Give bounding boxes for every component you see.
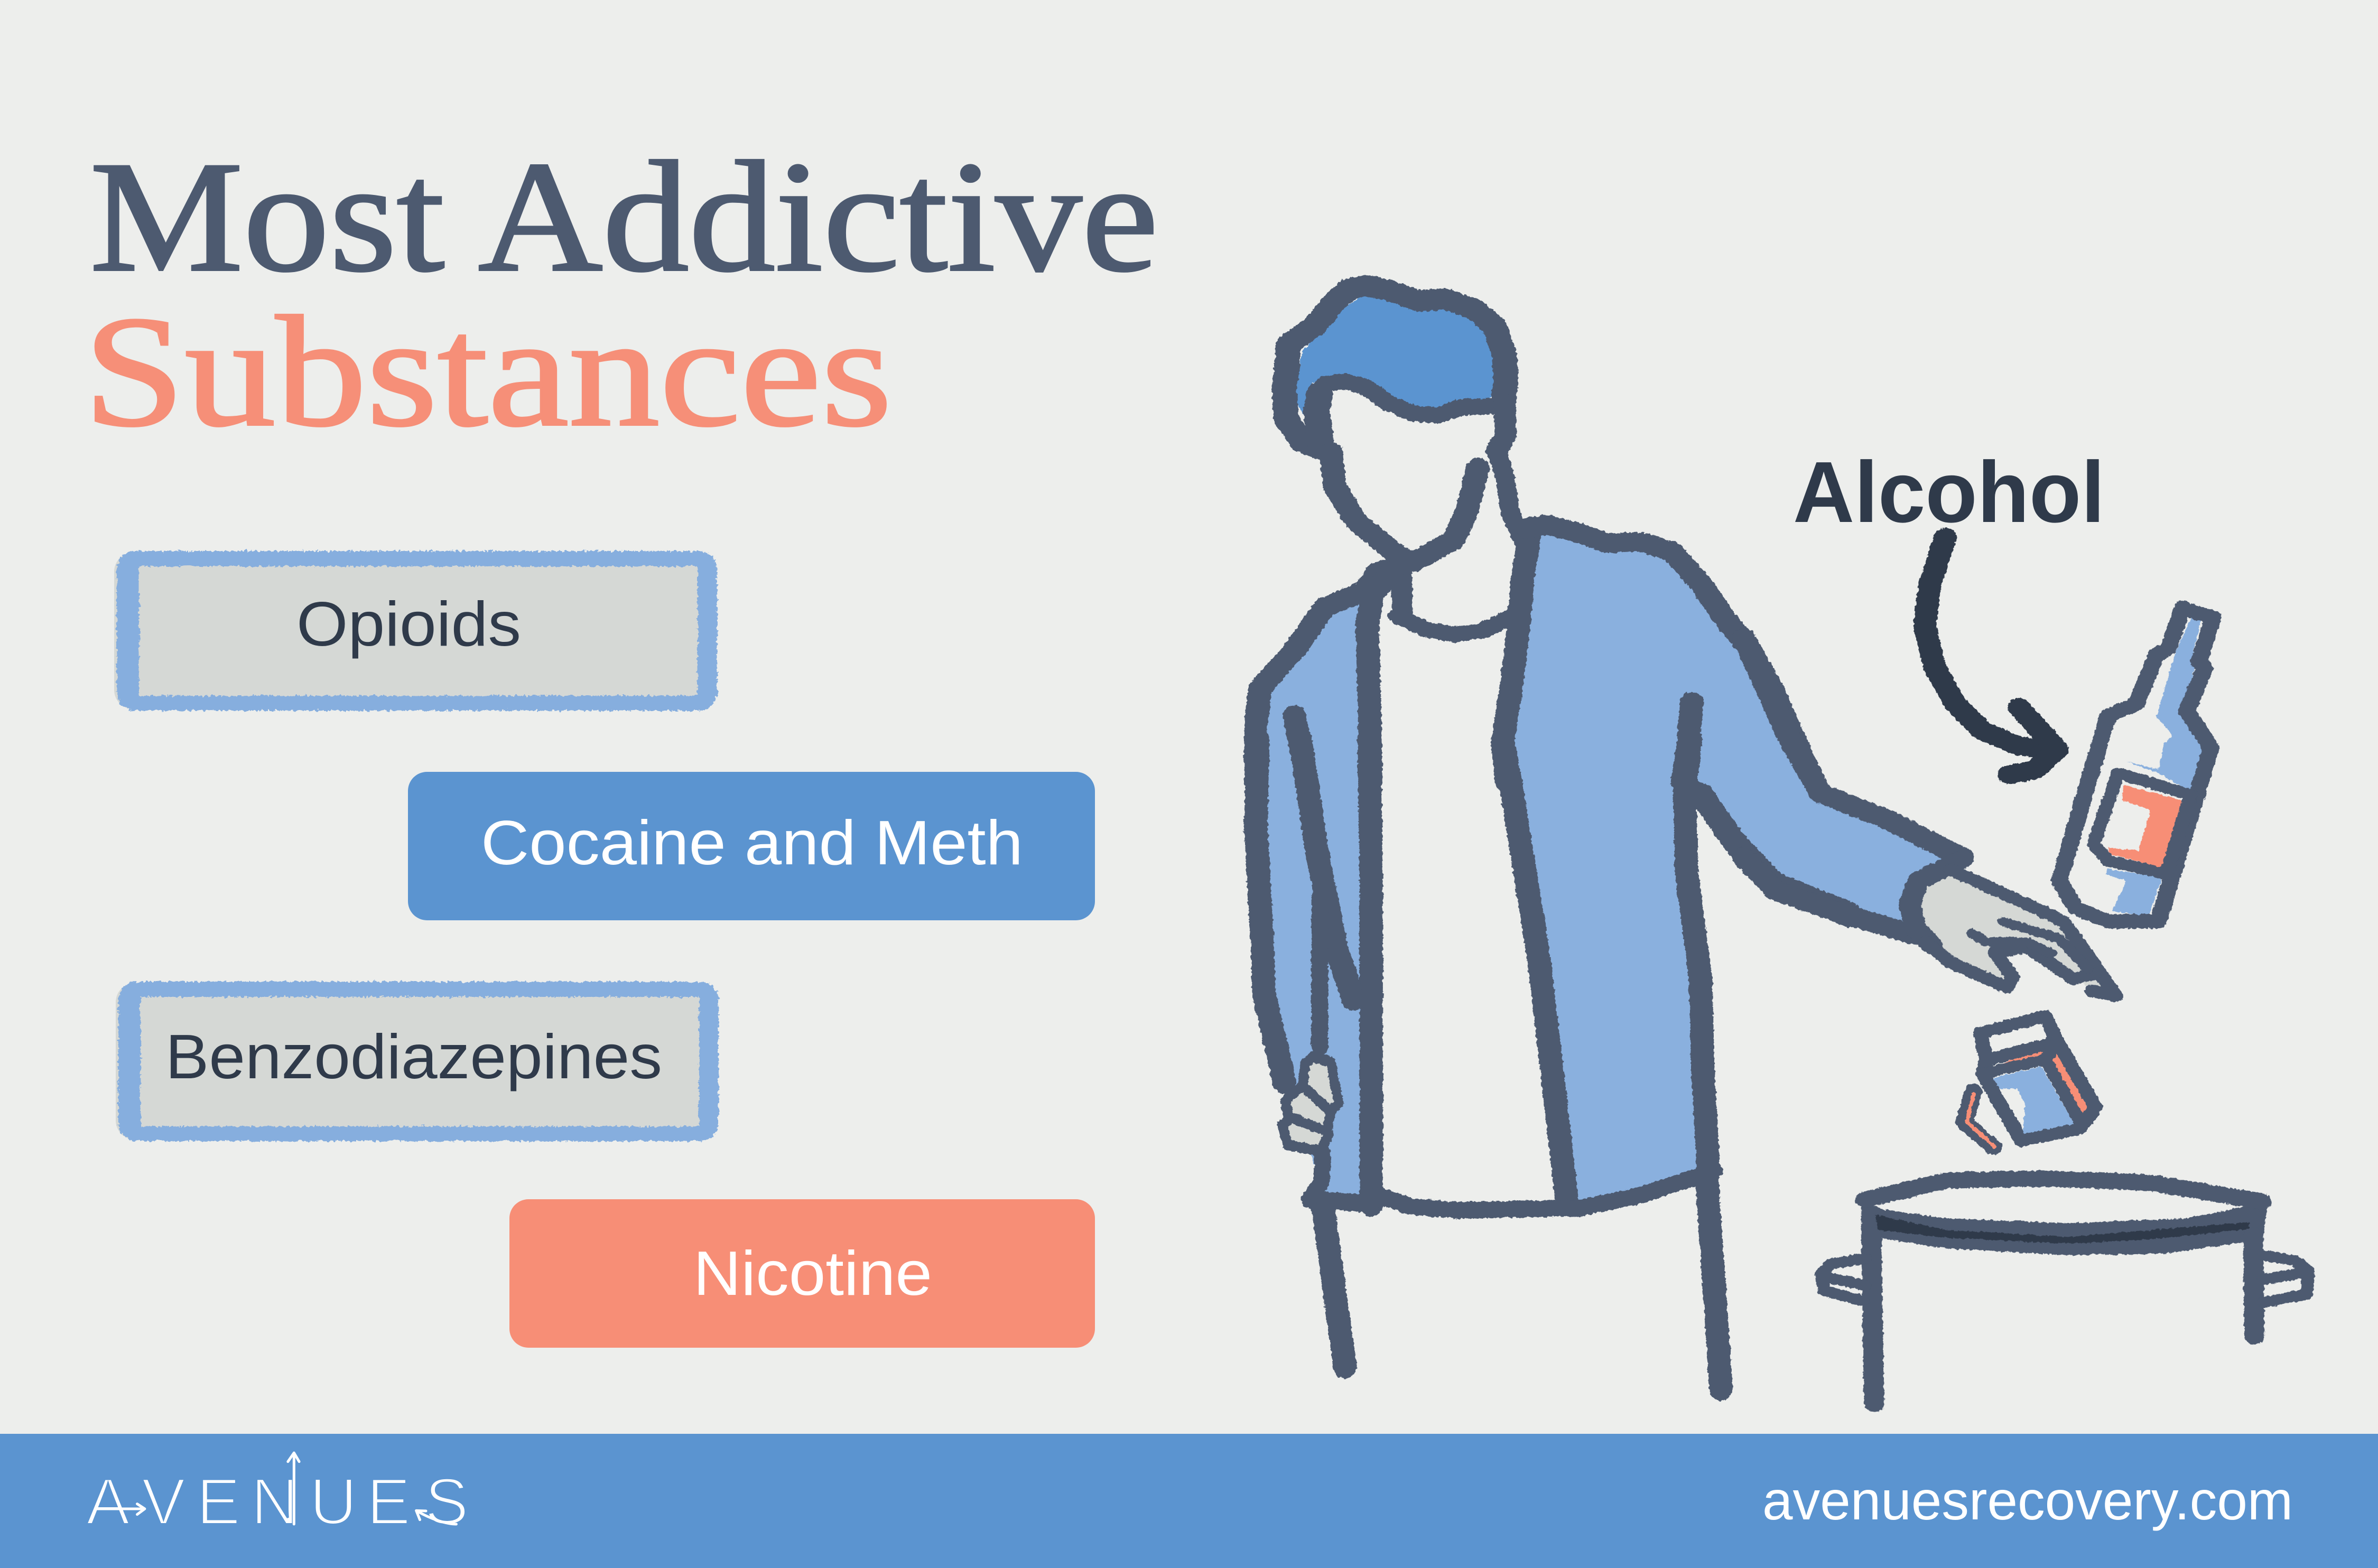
icon: bottle bbox=[2059, 608, 2213, 921]
left hand bbox=[1282, 1057, 1339, 1200]
box: Cocaine and Meth: Cocaine and Meth bbox=[481, 808, 1023, 878]
box: Opioids: Opioids bbox=[296, 589, 521, 659]
icon: trash can bbox=[1822, 1179, 2308, 1404]
icon: falling carton and straw bbox=[1964, 1016, 2096, 1147]
rim band bbox=[1861, 1201, 2268, 1255]
box: Nicotine bbox=[509, 1199, 1095, 1348]
box: Nicotine: Nicotine bbox=[693, 1238, 932, 1309]
hair outline bbox=[1284, 286, 1506, 452]
face bbox=[1497, 402, 1506, 451]
box: Cocaine and Meth bbox=[408, 772, 1095, 920]
label: Alcohol: Alcohol bbox=[1793, 444, 2105, 540]
right arm and hand outline bbox=[1744, 638, 1962, 935]
website url: avenuesrecovery.com bbox=[1762, 1470, 2293, 1532]
arm fill and hand fill bbox=[1744, 638, 1962, 938]
box: Benzodiazepines: Benzodiazepines bbox=[165, 1022, 662, 1092]
jacket and hair fills (upper) bbox=[1258, 292, 1814, 782]
head and upper body outline bbox=[1256, 286, 1814, 782]
box: Opioids bbox=[114, 551, 717, 711]
legs bbox=[1323, 1204, 1345, 1366]
jacket outline bbox=[1502, 527, 1531, 782]
title line: Substances: Substances bbox=[83, 284, 892, 459]
logo: Avenues: AVENUES bbox=[86, 1466, 469, 1538]
handles bbox=[1822, 1258, 1865, 1301]
box: Benzodiazepines bbox=[116, 982, 719, 1141]
lower body outline bbox=[1256, 740, 1850, 1388]
straw bbox=[1964, 1091, 1994, 1147]
figure: person dropping items bbox=[1256, 286, 2116, 1388]
arrow pointing to bottle bbox=[1925, 537, 2057, 775]
legs bbox=[1871, 1235, 1874, 1404]
neck and collar bbox=[1497, 451, 1523, 540]
jacket fills (lower) bbox=[1256, 740, 1850, 1204]
title bbox=[83, 129, 1158, 459]
footer band bbox=[0, 1434, 2378, 1568]
illustration bbox=[1256, 286, 2308, 1404]
title line: Most Addictive: Most Addictive bbox=[90, 129, 1158, 304]
